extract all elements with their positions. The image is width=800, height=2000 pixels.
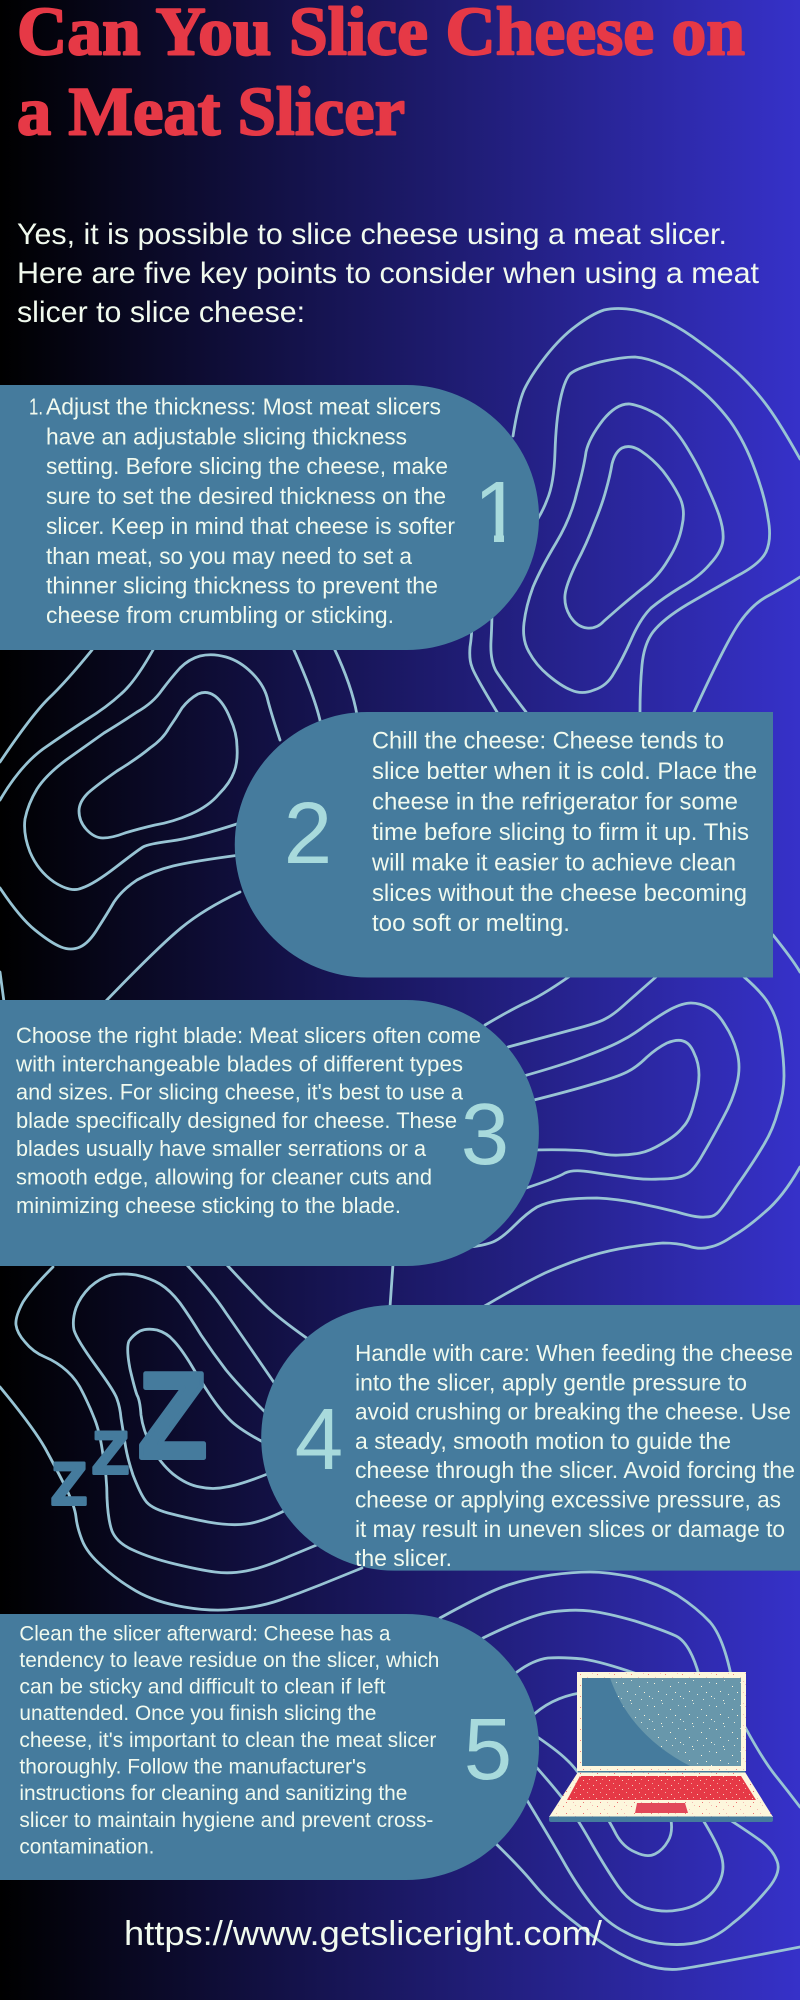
step 1 text: slicer. Keep in mind that cheese is softer — [46, 513, 455, 539]
intro text: Here are five key points to consider when using a meat — [17, 257, 760, 290]
icon: sleeping z letters: Z — [138, 1348, 207, 1484]
panel: step 3 — [0, 1000, 539, 1266]
step 2 text: slice better when it is cold. Place the — [372, 758, 757, 785]
website url: https://www.getsliceright.com/ — [124, 1915, 603, 1953]
step 3 text: minimizing cheese sticking to the blade. — [16, 1193, 401, 1218]
step 4 text — [355, 1340, 795, 1571]
step 4 text: the slicer. — [355, 1545, 452, 1571]
step 4 text: cheese through the slicer. Avoid forcing the — [355, 1457, 795, 1483]
trackpad — [635, 1803, 688, 1813]
panel shape 5 — [0, 1614, 539, 1880]
step 3 text: with interchangeable blades of different types — [15, 1051, 463, 1076]
keyboard — [567, 1776, 756, 1800]
step 1 text: 1. — [29, 394, 43, 420]
icon: sleeping z letters — [51, 1348, 207, 1518]
step 1 text: thinner slicing thickness to prevent the — [46, 572, 438, 598]
step 4 text: a steady, smooth motion to guide the — [355, 1428, 731, 1454]
step 1 text: Adjust the thickness: Most meat slicers — [46, 394, 441, 420]
step 4 text: into the slicer, apply gentle pressure to — [355, 1370, 747, 1396]
step 3 text: Choose the right blade: Meat slicers often come — [16, 1023, 481, 1048]
laptop screen — [582, 1678, 741, 1766]
step 3 text: blades usually have smaller serrations or a — [16, 1136, 426, 1161]
step 4 text: it may result in uneven slices or damage to — [355, 1516, 785, 1542]
laptop front edge — [549, 1816, 773, 1822]
panel: step 1 — [0, 385, 539, 650]
number 2: 2 — [284, 785, 332, 882]
step 3 text — [15, 1023, 481, 1218]
icon: sleeping z letters: Z — [51, 1450, 87, 1518]
contour lines: lower right — [440, 1572, 800, 1969]
step 1 text — [29, 394, 455, 628]
icon: laptop — [549, 1672, 773, 1822]
number 5: 5 — [464, 1701, 512, 1798]
panel: step 2 — [235, 712, 773, 978]
contour lines: middle right — [390, 935, 800, 1307]
panel shape 1 — [0, 385, 539, 650]
step 5 text: cheese, it's important to clean the meat slicer — [19, 1728, 436, 1752]
step 2 text: time before slicing to firm it up. This — [372, 819, 749, 846]
contour lines: middle left — [0, 648, 357, 1002]
step 3 text: and sizes. For slicing cheese, it's best to use a — [16, 1080, 463, 1104]
step 3 text: blade specifically designed for cheese. These — [16, 1108, 457, 1133]
intro text — [17, 218, 760, 329]
step 2 text: cheese in the refrigerator for some — [372, 788, 738, 816]
intro text: Yes, it is possible to slice cheese using a meat slicer. — [17, 218, 727, 251]
intro text: slicer to slice cheese: — [17, 296, 305, 329]
step 1 text: setting. Before slicing the cheese, make — [46, 453, 448, 479]
panel shape 4 — [261, 1305, 800, 1571]
panel: step 5 — [0, 1614, 539, 1880]
step 4 text: avoid crushing or breaking the cheese. Use — [355, 1399, 791, 1425]
step 5 text: can be sticky and difficult to clean if left — [19, 1675, 385, 1699]
step 5 text: Clean the slicer afterward: Cheese has a — [19, 1621, 390, 1645]
laptop base — [549, 1772, 773, 1817]
contour lines: top right — [470, 308, 800, 712]
laptop lid — [577, 1672, 746, 1771]
step 2 text: too soft or melting. — [372, 910, 570, 937]
step 5 text: slicer to maintain hygiene and prevent cross- — [19, 1808, 433, 1832]
step 2 text: will make it easier to achieve clean — [371, 850, 736, 876]
title — [17, 0, 745, 150]
step 5 text: instructions for cleaning and sanitizing the — [19, 1781, 407, 1805]
step 3 text: smooth edge, allowing for cleaner cuts and — [16, 1164, 432, 1190]
number 4: 4 — [295, 1391, 343, 1488]
step 5 text: tendency to leave residue on the slicer, which — [19, 1648, 439, 1672]
step 2 text — [371, 728, 757, 937]
step 5 text: unattended. Once you finish slicing the — [19, 1701, 376, 1725]
number 3: 3 — [461, 1086, 509, 1183]
contour lines: lower left — [0, 1265, 362, 1610]
step 4 text: cheese or applying excessive pressure, as — [355, 1486, 781, 1512]
step 5 text: contamination. — [19, 1834, 154, 1858]
step 2 text: Chill the cheese: Cheese tends to — [372, 728, 724, 754]
step 2 text: slices without the cheese becoming — [372, 880, 747, 907]
number 1: 1 — [474, 464, 522, 561]
step 1 text: cheese from crumbling or sticking. — [46, 602, 394, 628]
step 4 text: Handle with care: When feeding the cheese — [355, 1340, 793, 1366]
step 5 text: thoroughly. Follow the manufacturer's — [19, 1754, 366, 1778]
step 1 text: sure to set the desired thickness on the — [46, 483, 446, 509]
step 5 text — [19, 1621, 439, 1858]
panel: step 4 — [261, 1305, 800, 1571]
icon: sleeping z letters: Z — [92, 1420, 129, 1486]
step 1 text: have an adjustable slicing thickness — [46, 424, 407, 450]
step 1 text: than meat, so you may need to set a — [46, 543, 413, 569]
panel shape 3 — [0, 1000, 539, 1266]
screen glare — [610, 1678, 741, 1766]
title: a Meat Slicer — [17, 74, 405, 150]
panel shape 2 — [235, 712, 773, 978]
hinge — [578, 1771, 745, 1772]
